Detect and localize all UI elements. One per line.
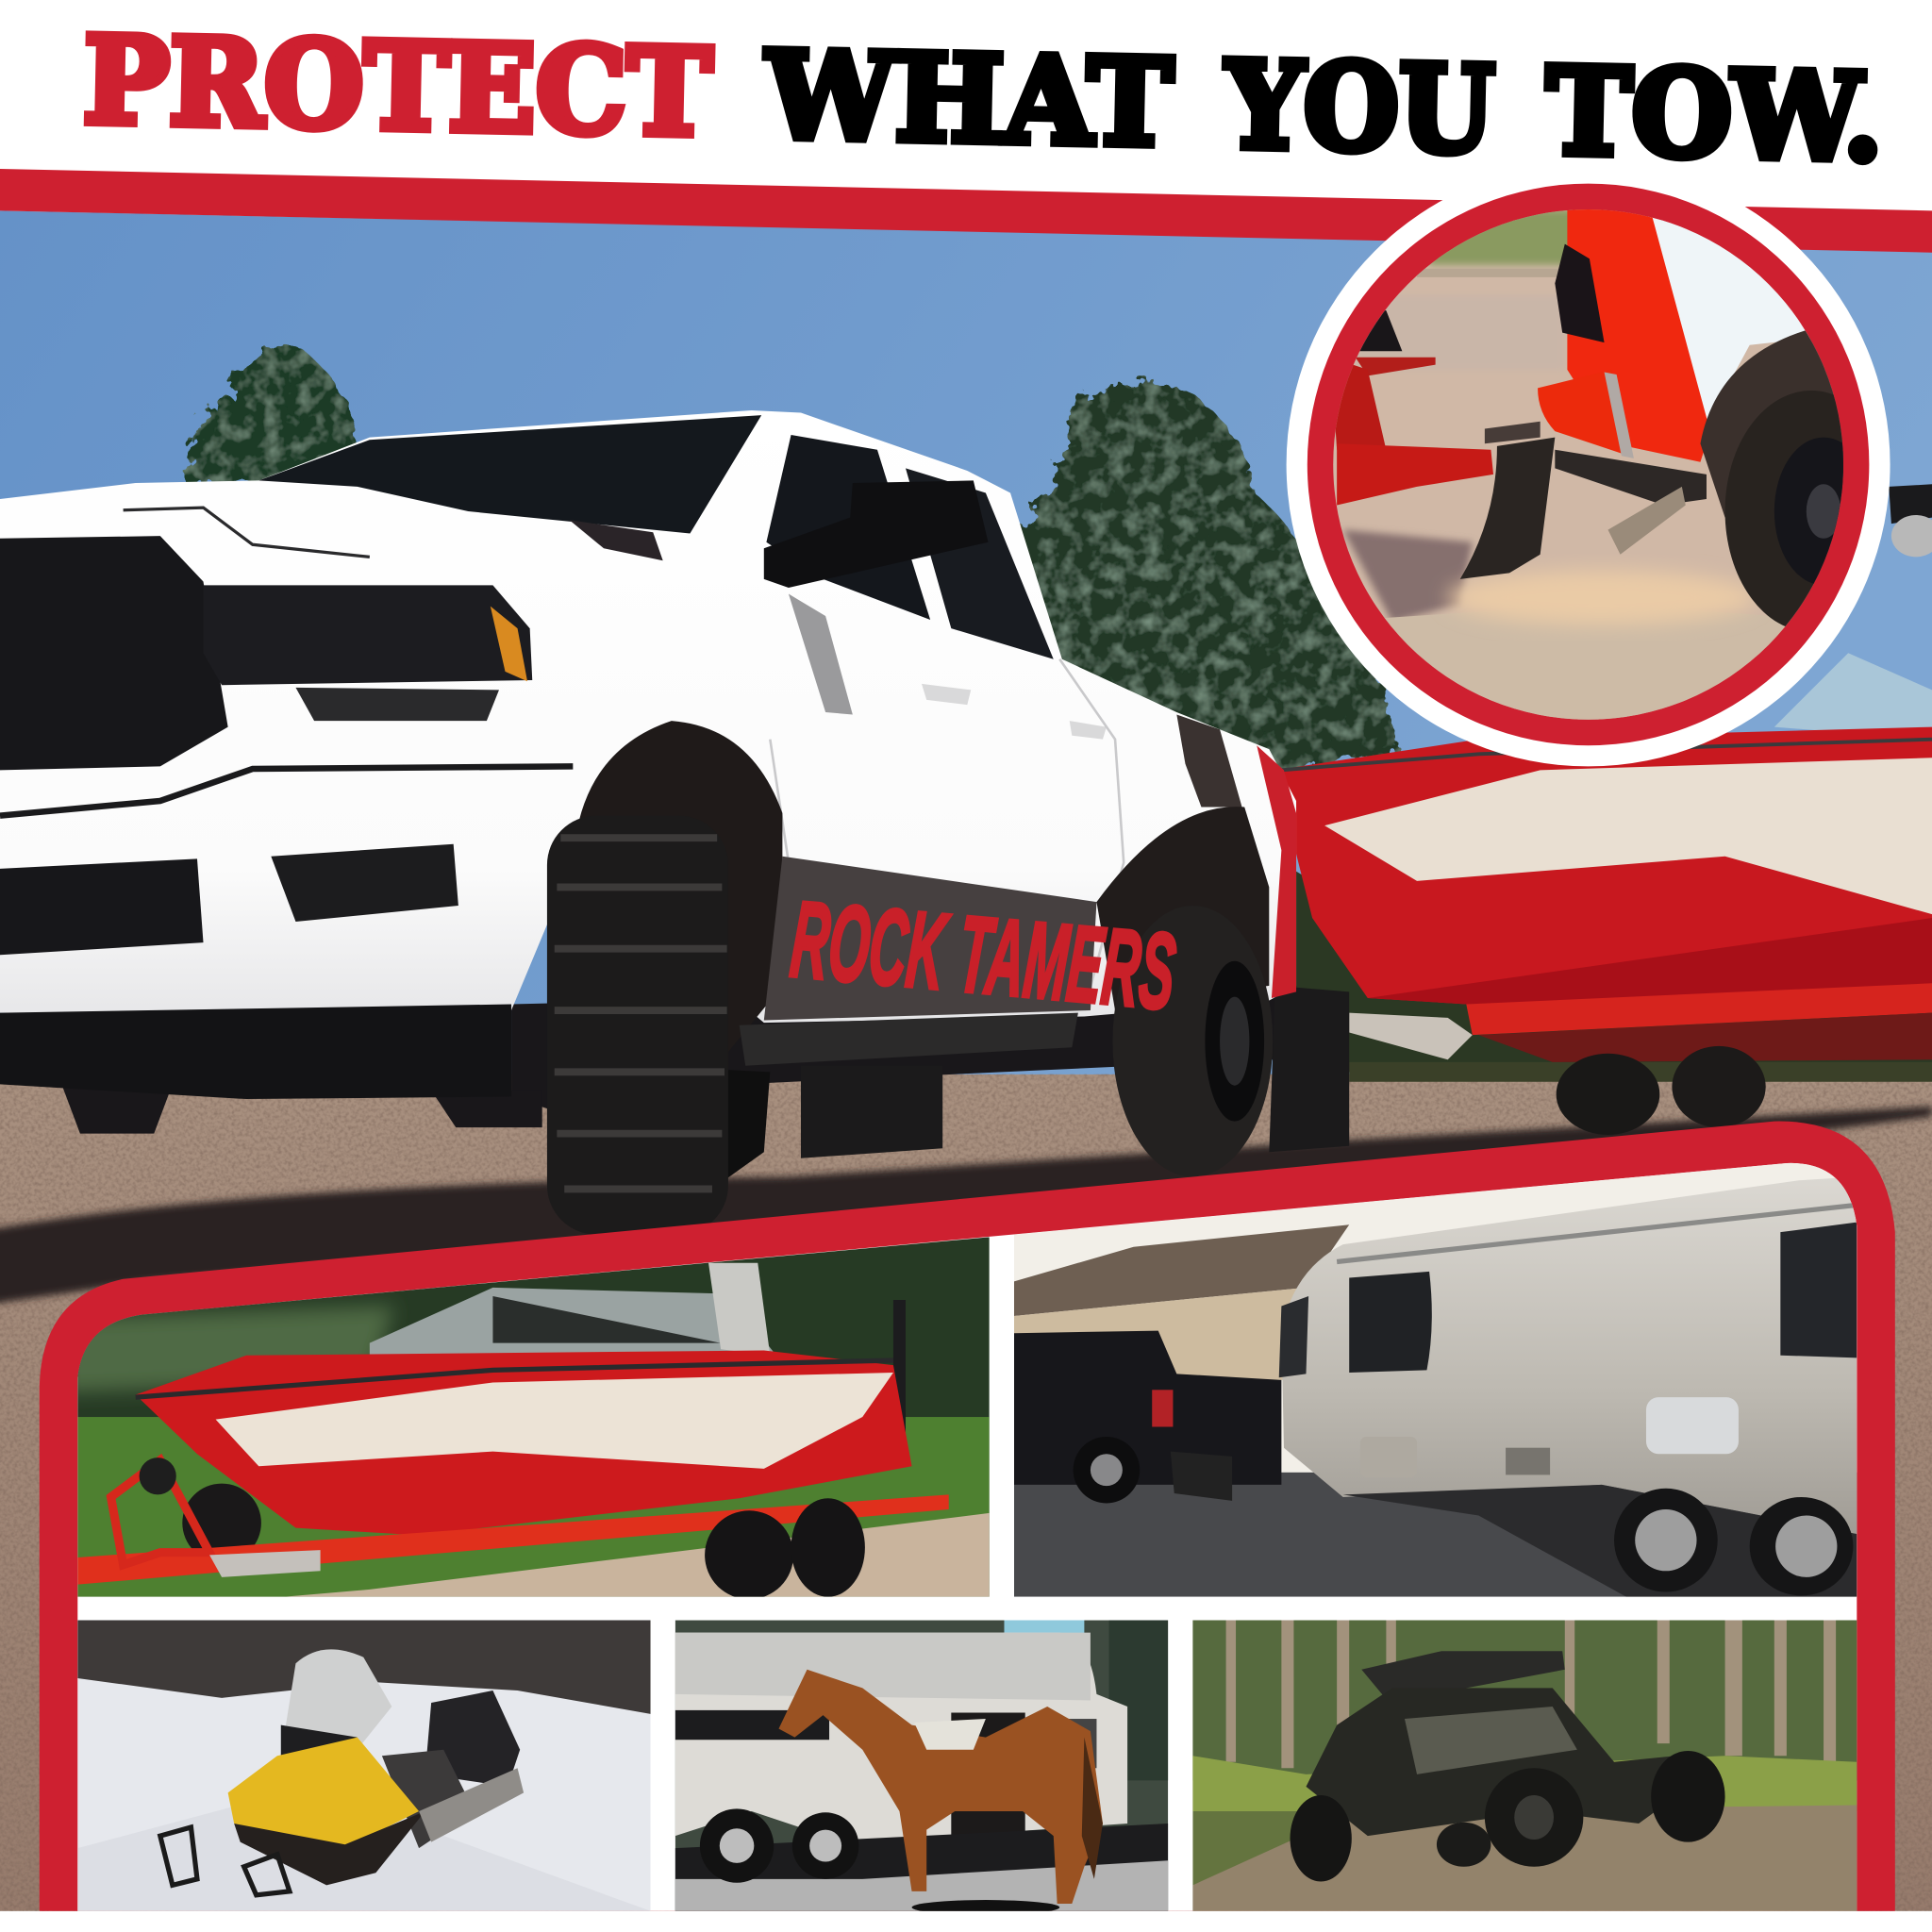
red frame: [40, 1122, 1895, 1911]
white bed panel: [1649, 217, 1809, 419]
red truck body: [1567, 204, 1710, 462]
door windows: [766, 435, 930, 620]
rocker band: [764, 857, 1096, 1020]
photo: horse and trailer: [675, 1621, 1168, 1915]
front wheel arch: [573, 721, 782, 1054]
tire: [1724, 391, 1843, 626]
mud flaps: [1269, 986, 1349, 1152]
door stripe: [789, 594, 853, 715]
title word: you: YOU: [1223, 34, 1495, 180]
circle inset: mud flap in action: [1287, 162, 1897, 766]
white ring: [1287, 162, 1890, 766]
boat behind truck: [1275, 653, 1932, 1135]
rear wheel arch: [1096, 807, 1269, 1010]
hood crease: [124, 508, 370, 557]
dark bed stripe: [1176, 715, 1242, 808]
trailer: [182, 1483, 261, 1549]
tail light: [1555, 244, 1605, 342]
trailer frame: [1356, 358, 1436, 375]
title word: what: WHAT: [763, 25, 1174, 174]
inset photo: [1333, 209, 1843, 720]
title word: protect: PROTECT: [82, 9, 713, 163]
red bed edge: [1257, 745, 1296, 998]
pickup truck: ROCK TAMERS: [787, 879, 1180, 1033]
fog lamp: [271, 844, 458, 922]
white inner: [77, 1163, 1857, 1911]
title word: tow: TOW.: [1544, 41, 1885, 188]
trees: [185, 342, 1932, 1072]
panel: towing examples frame: [40, 1122, 1895, 1915]
running board: [740, 1013, 1078, 1066]
headlight: [204, 585, 532, 685]
dust cloud: [1448, 571, 1756, 625]
ground: [0, 1074, 1932, 1911]
door seam: [770, 659, 1124, 1010]
hitch and exhaust: [1555, 450, 1707, 506]
door mirror: [764, 480, 989, 588]
photo: utility side by side: [1192, 1621, 1857, 1911]
wheel arch: [1700, 330, 1843, 518]
right edge mirror fragment: [1889, 484, 1932, 524]
bumper line: [0, 766, 573, 816]
rear tire: [1112, 906, 1273, 1176]
bumper: [1538, 379, 1621, 453]
truck underbody: [511, 986, 1281, 1109]
lower bumper: [0, 1004, 511, 1099]
photo: snowmobile: [77, 1621, 651, 1911]
boat hull: [136, 1351, 912, 1535]
photo: boat on trailer: [61, 1232, 990, 1599]
gravel: [1385, 615, 1792, 720]
grille: [0, 536, 228, 770]
black pickup: [1014, 1331, 1281, 1485]
ground shadow: [0, 1107, 1932, 1306]
door handles: [922, 684, 1107, 740]
gravel texture: [0, 1074, 1932, 1911]
front tire: [547, 816, 728, 1235]
title: [82, 9, 1885, 188]
sky: [0, 210, 1932, 1109]
silver airstream: [1281, 1176, 1857, 1534]
photo: travel trailer: [1014, 1158, 1857, 1597]
far front tire: [721, 1070, 770, 1183]
windshield: [258, 415, 761, 534]
truck white body: [0, 410, 1296, 1023]
red ring: [1307, 184, 1869, 745]
mud flap: [1460, 438, 1555, 579]
pickup truck: [0, 410, 1349, 1235]
red diagonal band: [0, 169, 1932, 253]
lower intake: [0, 858, 204, 955]
